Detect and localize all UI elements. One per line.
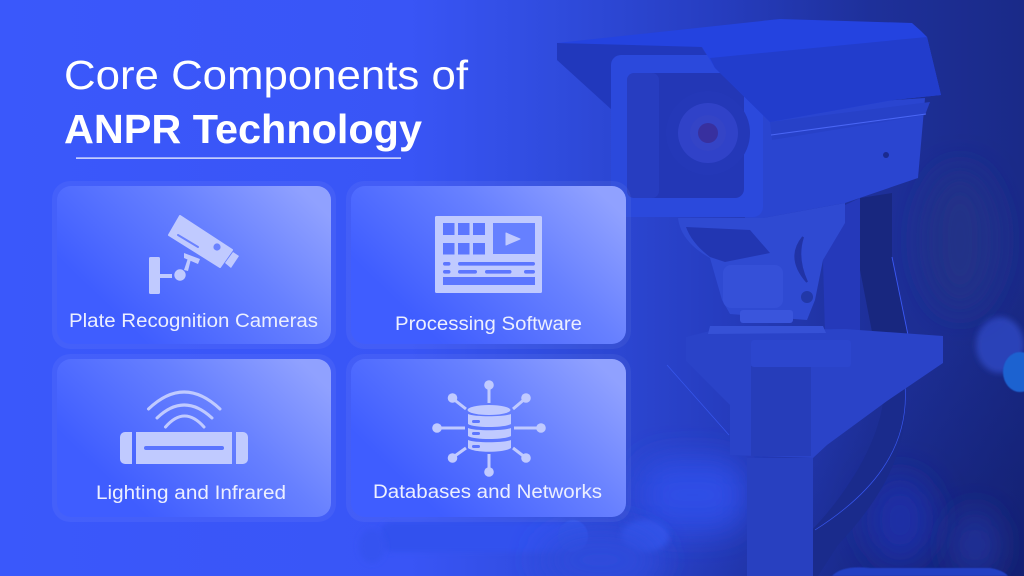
label: Databases and Networks — [373, 482, 602, 503]
camera mount base — [686, 329, 943, 458]
title — [64, 52, 469, 152]
label: Plate Recognition Cameras — [69, 311, 318, 332]
title underline — [76, 158, 401, 159]
panel: plate recognition cameras — [52, 181, 336, 349]
panel: processing software — [346, 181, 631, 349]
camera hood underside — [557, 43, 716, 110]
camera body side — [745, 98, 925, 218]
panel: databases and networks — [346, 354, 631, 522]
icon: infrared light — [120, 392, 248, 464]
camera lens — [666, 91, 750, 175]
camera pole — [747, 458, 813, 576]
title line 1: Core Components of — [64, 52, 469, 98]
icon: security camera — [149, 216, 239, 294]
camera photo — [557, 19, 943, 576]
camera cable — [812, 193, 908, 576]
camera lens window — [627, 73, 744, 198]
icon: database network — [432, 380, 546, 477]
camera front — [611, 55, 763, 217]
background bokeh lights — [359, 170, 1024, 576]
camera hood — [557, 19, 941, 122]
label: Processing Software — [395, 314, 582, 335]
camera bracket — [678, 203, 845, 323]
label: Lighting and Infrared — [96, 483, 286, 504]
title line 2: ANPR Technology — [64, 106, 422, 152]
icon: video editor — [435, 216, 542, 293]
panel: lighting and infrared — [52, 354, 336, 522]
